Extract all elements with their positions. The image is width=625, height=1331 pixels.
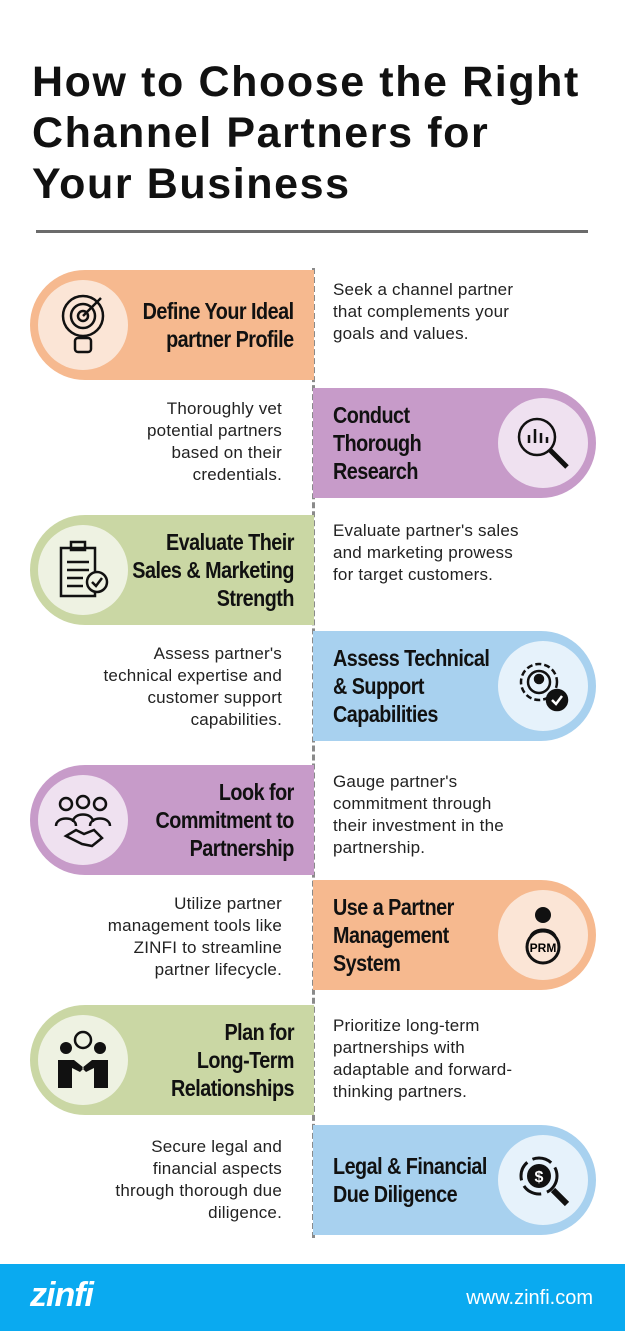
heading: partner Profile xyxy=(167,326,294,352)
text: define: that complements your xyxy=(333,302,509,321)
text: long-term: thinking partners. xyxy=(333,1082,467,1101)
heading: Strength xyxy=(217,585,294,611)
footer xyxy=(0,1264,625,1331)
text: legal: financial aspects xyxy=(153,1159,282,1178)
title: Your Business xyxy=(32,160,351,208)
panel: long-term xyxy=(30,1005,314,1115)
text: sales: for target customers. xyxy=(333,565,493,584)
text: legal xyxy=(115,1137,282,1222)
heading xyxy=(333,894,454,976)
text: legal: Secure legal and xyxy=(151,1137,282,1156)
url: www.zinfi.com xyxy=(466,1287,593,1309)
text: define xyxy=(333,280,513,343)
text: research: Thoroughly vet xyxy=(167,399,282,418)
text: research: based on their xyxy=(171,443,282,462)
heading xyxy=(333,1153,487,1207)
heading: Assess Technical xyxy=(333,645,489,671)
text: PRM: management tools like xyxy=(108,916,282,935)
heading xyxy=(132,529,294,611)
text: research xyxy=(147,399,282,484)
text: long-term: partnerships with xyxy=(333,1038,465,1057)
text: commitment: their investment in the xyxy=(333,816,504,835)
text: technical: technical expertise and xyxy=(104,666,282,685)
text: define: Seek a channel partner xyxy=(333,280,513,299)
text: technical: Assess partner's xyxy=(154,644,282,663)
text: technical: customer support xyxy=(147,688,282,707)
icon: PRM: PRM xyxy=(530,941,556,955)
heading: Legal & Financial xyxy=(333,1153,487,1179)
icon: dollar magnifier: $ xyxy=(535,1169,544,1186)
panel: conduct research xyxy=(313,388,596,498)
text: commitment: commitment through xyxy=(333,794,492,813)
icon: dollar magnifier xyxy=(498,1135,588,1225)
icon: handshake team xyxy=(38,775,128,865)
panel: PRM xyxy=(313,880,596,990)
heading: Thorough xyxy=(333,430,421,456)
heading xyxy=(333,645,489,727)
heading: Partnership xyxy=(190,835,294,861)
heading: Use a Partner xyxy=(333,894,454,920)
heading: Evaluate Their xyxy=(166,529,294,555)
heading: Plan for xyxy=(224,1019,294,1045)
icon: handshake clock xyxy=(38,1015,128,1105)
text: sales: and marketing prowess xyxy=(333,543,513,562)
heading xyxy=(143,298,294,352)
heading: Sales & Marketing xyxy=(132,557,294,583)
heading: Due Diligence xyxy=(333,1181,457,1207)
panel: commitment xyxy=(30,765,314,875)
heading: Capabilities xyxy=(333,701,438,727)
text: PRM xyxy=(108,894,282,979)
heading xyxy=(171,1019,294,1101)
text: research: potential partners xyxy=(147,421,282,440)
icon: magnifier xyxy=(498,398,588,488)
heading xyxy=(333,402,421,484)
icon: clipboard xyxy=(38,525,128,615)
text: long-term: Prioritize long-term xyxy=(333,1016,480,1035)
panel: sales marketing xyxy=(30,515,314,625)
title: Channel Partners for xyxy=(32,109,489,157)
text: research: credentials. xyxy=(193,465,282,484)
heading: Management xyxy=(333,922,449,948)
icon: gear person xyxy=(498,641,588,731)
text: technical: capabilities. xyxy=(191,710,282,729)
heading: System xyxy=(333,950,400,976)
heading: Look for xyxy=(219,779,294,805)
panel: define ideal partner profile xyxy=(30,270,314,380)
heading: Define Your Ideal xyxy=(143,298,294,324)
text: commitment xyxy=(333,772,504,857)
icon: PRM xyxy=(498,890,588,980)
panel: legal financial xyxy=(313,1125,596,1235)
text: technical xyxy=(104,644,282,729)
heading xyxy=(156,779,294,861)
text: PRM: partner lifecycle. xyxy=(155,960,282,979)
text: legal: diligence. xyxy=(208,1203,282,1222)
text: commitment: partnership. xyxy=(333,838,425,857)
heading: Conduct xyxy=(333,402,410,428)
heading: & Support xyxy=(333,673,424,699)
text: commitment: Gauge partner's xyxy=(333,772,457,791)
text: PRM: ZINFI to streamline xyxy=(134,938,282,957)
text: legal: through thorough due xyxy=(115,1181,282,1200)
text: sales xyxy=(333,521,519,584)
text: PRM: Utilize partner xyxy=(174,894,282,913)
title xyxy=(32,58,580,208)
title: How to Choose the Right xyxy=(32,58,580,106)
icon: target bulb xyxy=(38,280,128,370)
heading: Research xyxy=(333,458,418,484)
panel: technical support xyxy=(313,631,596,741)
text: sales: Evaluate partner's sales xyxy=(333,521,519,540)
heading: Long-Term xyxy=(197,1047,294,1073)
text: define: goals and values. xyxy=(333,324,469,343)
heading: Commitment to xyxy=(156,807,294,833)
heading: Relationships xyxy=(171,1075,294,1101)
logo: zinfi xyxy=(30,1276,93,1314)
text: long-term xyxy=(333,1016,512,1101)
text: long-term: adaptable and forward- xyxy=(333,1060,512,1079)
